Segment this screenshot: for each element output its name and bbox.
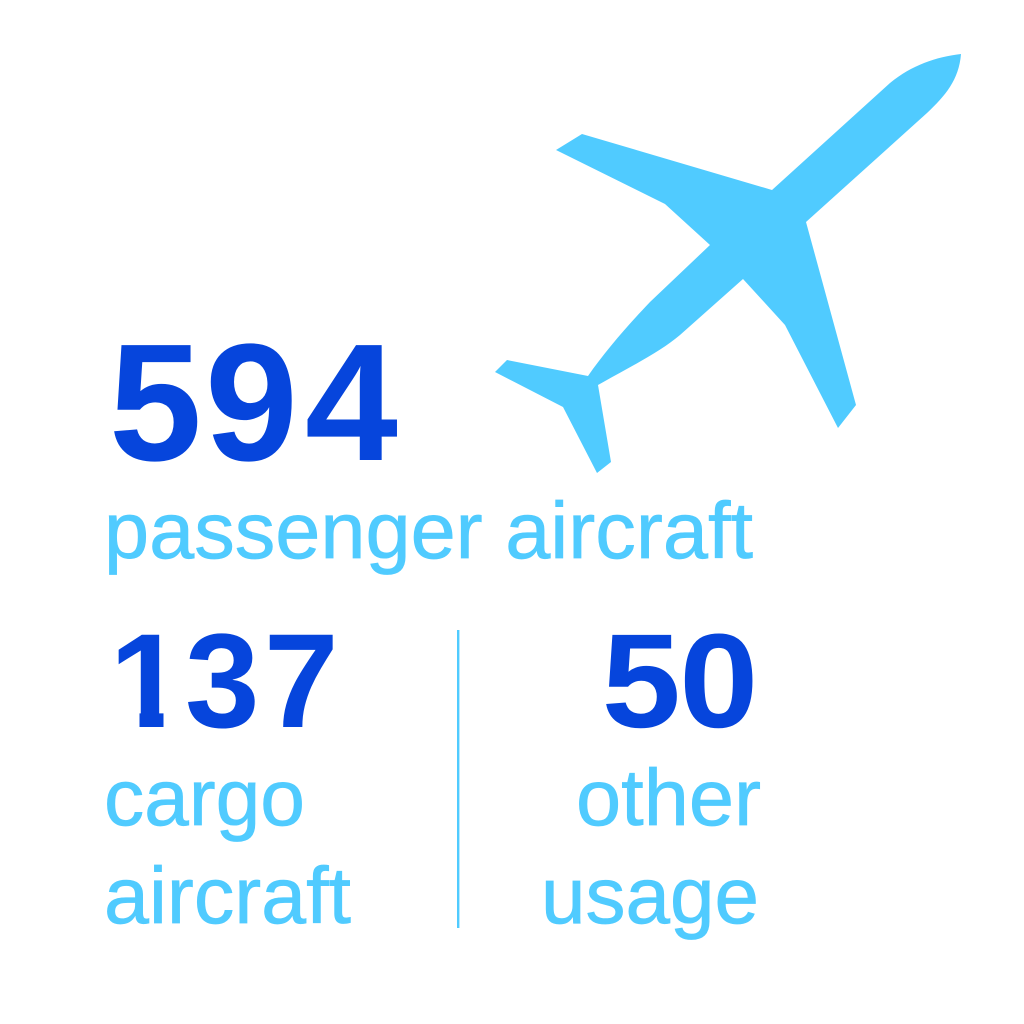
stat: 594: 594	[109, 310, 398, 496]
label: cargo aircraft: cargo	[104, 753, 305, 842]
label: passenger aircraft: passenger aircraft	[104, 486, 753, 575]
label: cargo aircraft	[104, 753, 351, 940]
label: other usage	[541, 753, 761, 940]
label: other usage: usage	[541, 851, 759, 940]
stat: 137: 137	[110, 607, 339, 756]
label: other usage: other	[576, 753, 761, 842]
label: cargo aircraft: aircraft	[104, 851, 351, 940]
stat: 50: 50	[602, 607, 758, 756]
icon: airplane	[495, 54, 961, 473]
